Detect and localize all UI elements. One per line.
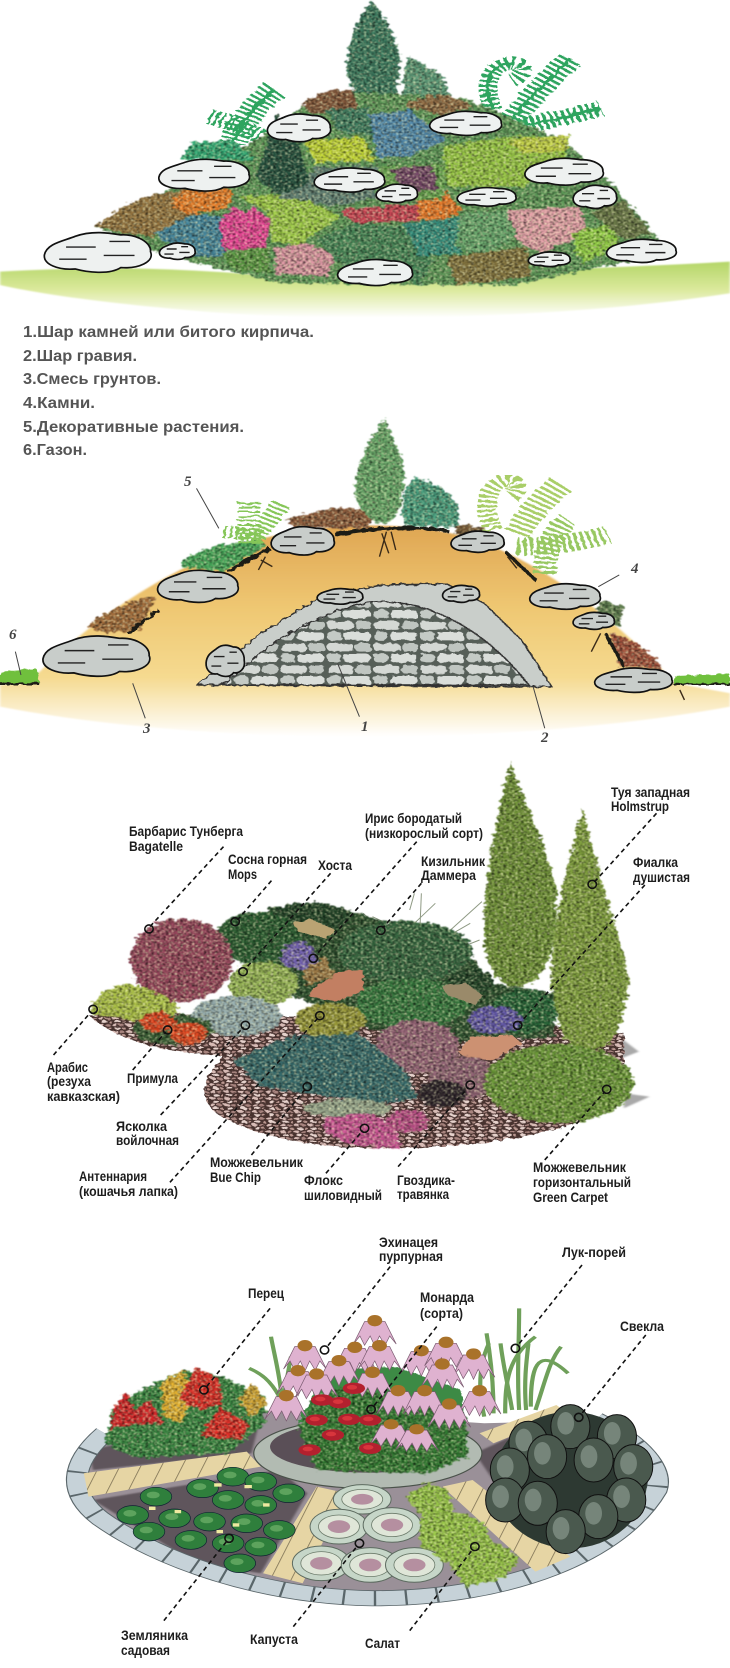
- ferns behind mound: [210, 58, 601, 143]
- garden rocks: [293, 918, 521, 1060]
- plant labels: round bed: Эхинацея: [379, 1234, 438, 1250]
- decorative plants: [182, 418, 459, 572]
- plant labels: rockery: Флокс: [304, 1172, 343, 1188]
- surface soil line: [0, 528, 730, 683]
- brown humus patches: [86, 508, 663, 668]
- plant labels: rockery: Арабис: [47, 1059, 88, 1075]
- plant labels: round bed: (сорта): [420, 1305, 463, 1321]
- legend list: 4.Камни.: [23, 395, 95, 412]
- plant labels: rockery: Green Carpet: [533, 1189, 608, 1205]
- plant labels: rockery: Туя западная: [611, 784, 690, 800]
- plant labels: rockery: (низкорослый сорт): [365, 825, 483, 841]
- plant labels: round bed: Монарда: [420, 1289, 474, 1305]
- cross-section numbers: 4: [630, 561, 639, 577]
- plant labels: rockery: Можжевельник: [533, 1159, 627, 1175]
- illustration: round mixed flower and vegetable bed: [77, 1265, 658, 1631]
- plant labels: rockery: Гвоздика-: [397, 1172, 455, 1188]
- leader lines: [15, 488, 619, 728]
- soil body: [0, 525, 730, 737]
- plant labels: round bed: Салат: [365, 1635, 400, 1651]
- legend list: 2.Шар гравия.: [23, 348, 137, 365]
- cabbages: [292, 1485, 443, 1582]
- perennials: [91, 918, 633, 1148]
- leader lines: [54, 813, 656, 1182]
- monarda and right-side foliage: [298, 1383, 468, 1473]
- thuja trees: [484, 762, 629, 1052]
- plant labels: rockery: Ясколка: [116, 1118, 167, 1134]
- dark soil under beds: [88, 1417, 652, 1573]
- cross-section numbers: 2: [540, 730, 549, 746]
- echinacea flowers rear: [284, 1315, 495, 1389]
- plant labels: round bed: Лук-порей: [562, 1244, 626, 1260]
- gravel ground: [91, 1010, 624, 1148]
- plant labels: round bed: Капуста: [250, 1631, 298, 1647]
- plant labels: rockery: Holmstrup: [611, 798, 669, 814]
- illustration: planting scheme of conifer rockery: [54, 762, 656, 1182]
- lawn strip: [0, 262, 730, 318]
- plant labels: rockery: Даммера: [421, 867, 476, 883]
- planted slope patches: [95, 89, 670, 285]
- plant labels: rockery: Барбарис Тунберга: [129, 823, 243, 839]
- plant labels: rockery: кавказская): [47, 1088, 120, 1104]
- illustration: rock garden cross-section: [0, 418, 730, 737]
- conifers on top: [347, 0, 450, 110]
- gravel dome: [198, 584, 552, 687]
- plant labels: rockery: Антеннария: [79, 1168, 147, 1184]
- ferns: [223, 480, 608, 573]
- cross-section numbers: 1: [361, 719, 368, 735]
- broken-stone core: [223, 602, 528, 685]
- plant labels: round bed: Земляника: [121, 1627, 188, 1643]
- white rocks: [44, 111, 676, 286]
- marker circles: [89, 880, 611, 1132]
- plant labels: rockery: (резуха: [47, 1073, 91, 1089]
- plant labels: rockery: шиловидный: [304, 1187, 382, 1203]
- roots: [258, 532, 684, 700]
- plant labels: rockery: горизонтальный: [533, 1174, 631, 1190]
- strawberries: [117, 1467, 305, 1573]
- plant labels: rockery: Mops: [228, 866, 257, 882]
- plant labels: rockery: Bagatelle: [129, 838, 183, 854]
- plant labels: round bed: садовая: [121, 1642, 170, 1658]
- stone border: [77, 1420, 658, 1598]
- plant labels: rockery: Сосна горная: [228, 851, 307, 867]
- plant labels: rockery: Ирис бородатый: [365, 810, 462, 826]
- plant labels: rockery: Bue Chip: [210, 1169, 261, 1185]
- lettuce: [405, 1482, 519, 1587]
- legend list: [23, 324, 314, 459]
- grey rocks: [43, 527, 672, 692]
- plant labels: round bed: Свекла: [620, 1318, 664, 1334]
- legend list: 1.Шар камней или битого кирпича.: [23, 324, 314, 341]
- lawn edges: [0, 669, 730, 683]
- legend list: 3.Смесь грунтов.: [23, 371, 161, 388]
- cross-section numbers: 3: [142, 721, 151, 737]
- cross-section numbers: 6: [9, 627, 17, 643]
- shadows: [615, 1033, 650, 1108]
- plant labels: round bed: Перец: [248, 1285, 284, 1301]
- plant labels: rockery: [47, 784, 690, 1205]
- echinacea flowers front: [265, 1365, 501, 1452]
- plant labels: rockery: Можжевельник: [210, 1154, 304, 1170]
- rear shrubs: [216, 903, 557, 1043]
- cross-section numbers: 5: [184, 474, 192, 490]
- plant labels: round bed: [121, 1234, 664, 1658]
- plant labels: rockery: Фиалка: [633, 854, 678, 870]
- plant labels: rockery: Примула: [127, 1070, 178, 1086]
- bed soil: [77, 1410, 658, 1598]
- cotoneaster spiky twigs: [363, 893, 482, 957]
- plant labels: rockery: Хоста: [318, 857, 352, 873]
- legend list: 5.Декоративные растения.: [23, 419, 244, 436]
- cross-section numbers: [9, 474, 639, 746]
- central raised circle: [254, 1418, 482, 1488]
- plant labels: rockery: (кошачья лапка): [79, 1183, 178, 1199]
- tan paths: [84, 1405, 570, 1583]
- plant labels: rockery: душистая: [633, 869, 690, 885]
- marker circles: [200, 1344, 583, 1551]
- plant labels: round bed: пурпурная: [379, 1248, 443, 1264]
- plant labels: rockery: травянка: [397, 1186, 449, 1202]
- plant labels: rockery: Кизильник: [421, 853, 486, 869]
- upper green foliage: [298, 1367, 466, 1423]
- plant labels: rockery: войлочная: [116, 1132, 179, 1148]
- leek: [249, 1308, 568, 1417]
- leader lines: [164, 1265, 646, 1631]
- pepper bed: [105, 1367, 268, 1458]
- beet leaves: [486, 1405, 653, 1554]
- illustration: rock garden mound exterior: [0, 0, 730, 318]
- monarda blooms: [298, 1383, 381, 1456]
- legend list: 6.Газон.: [23, 442, 87, 459]
